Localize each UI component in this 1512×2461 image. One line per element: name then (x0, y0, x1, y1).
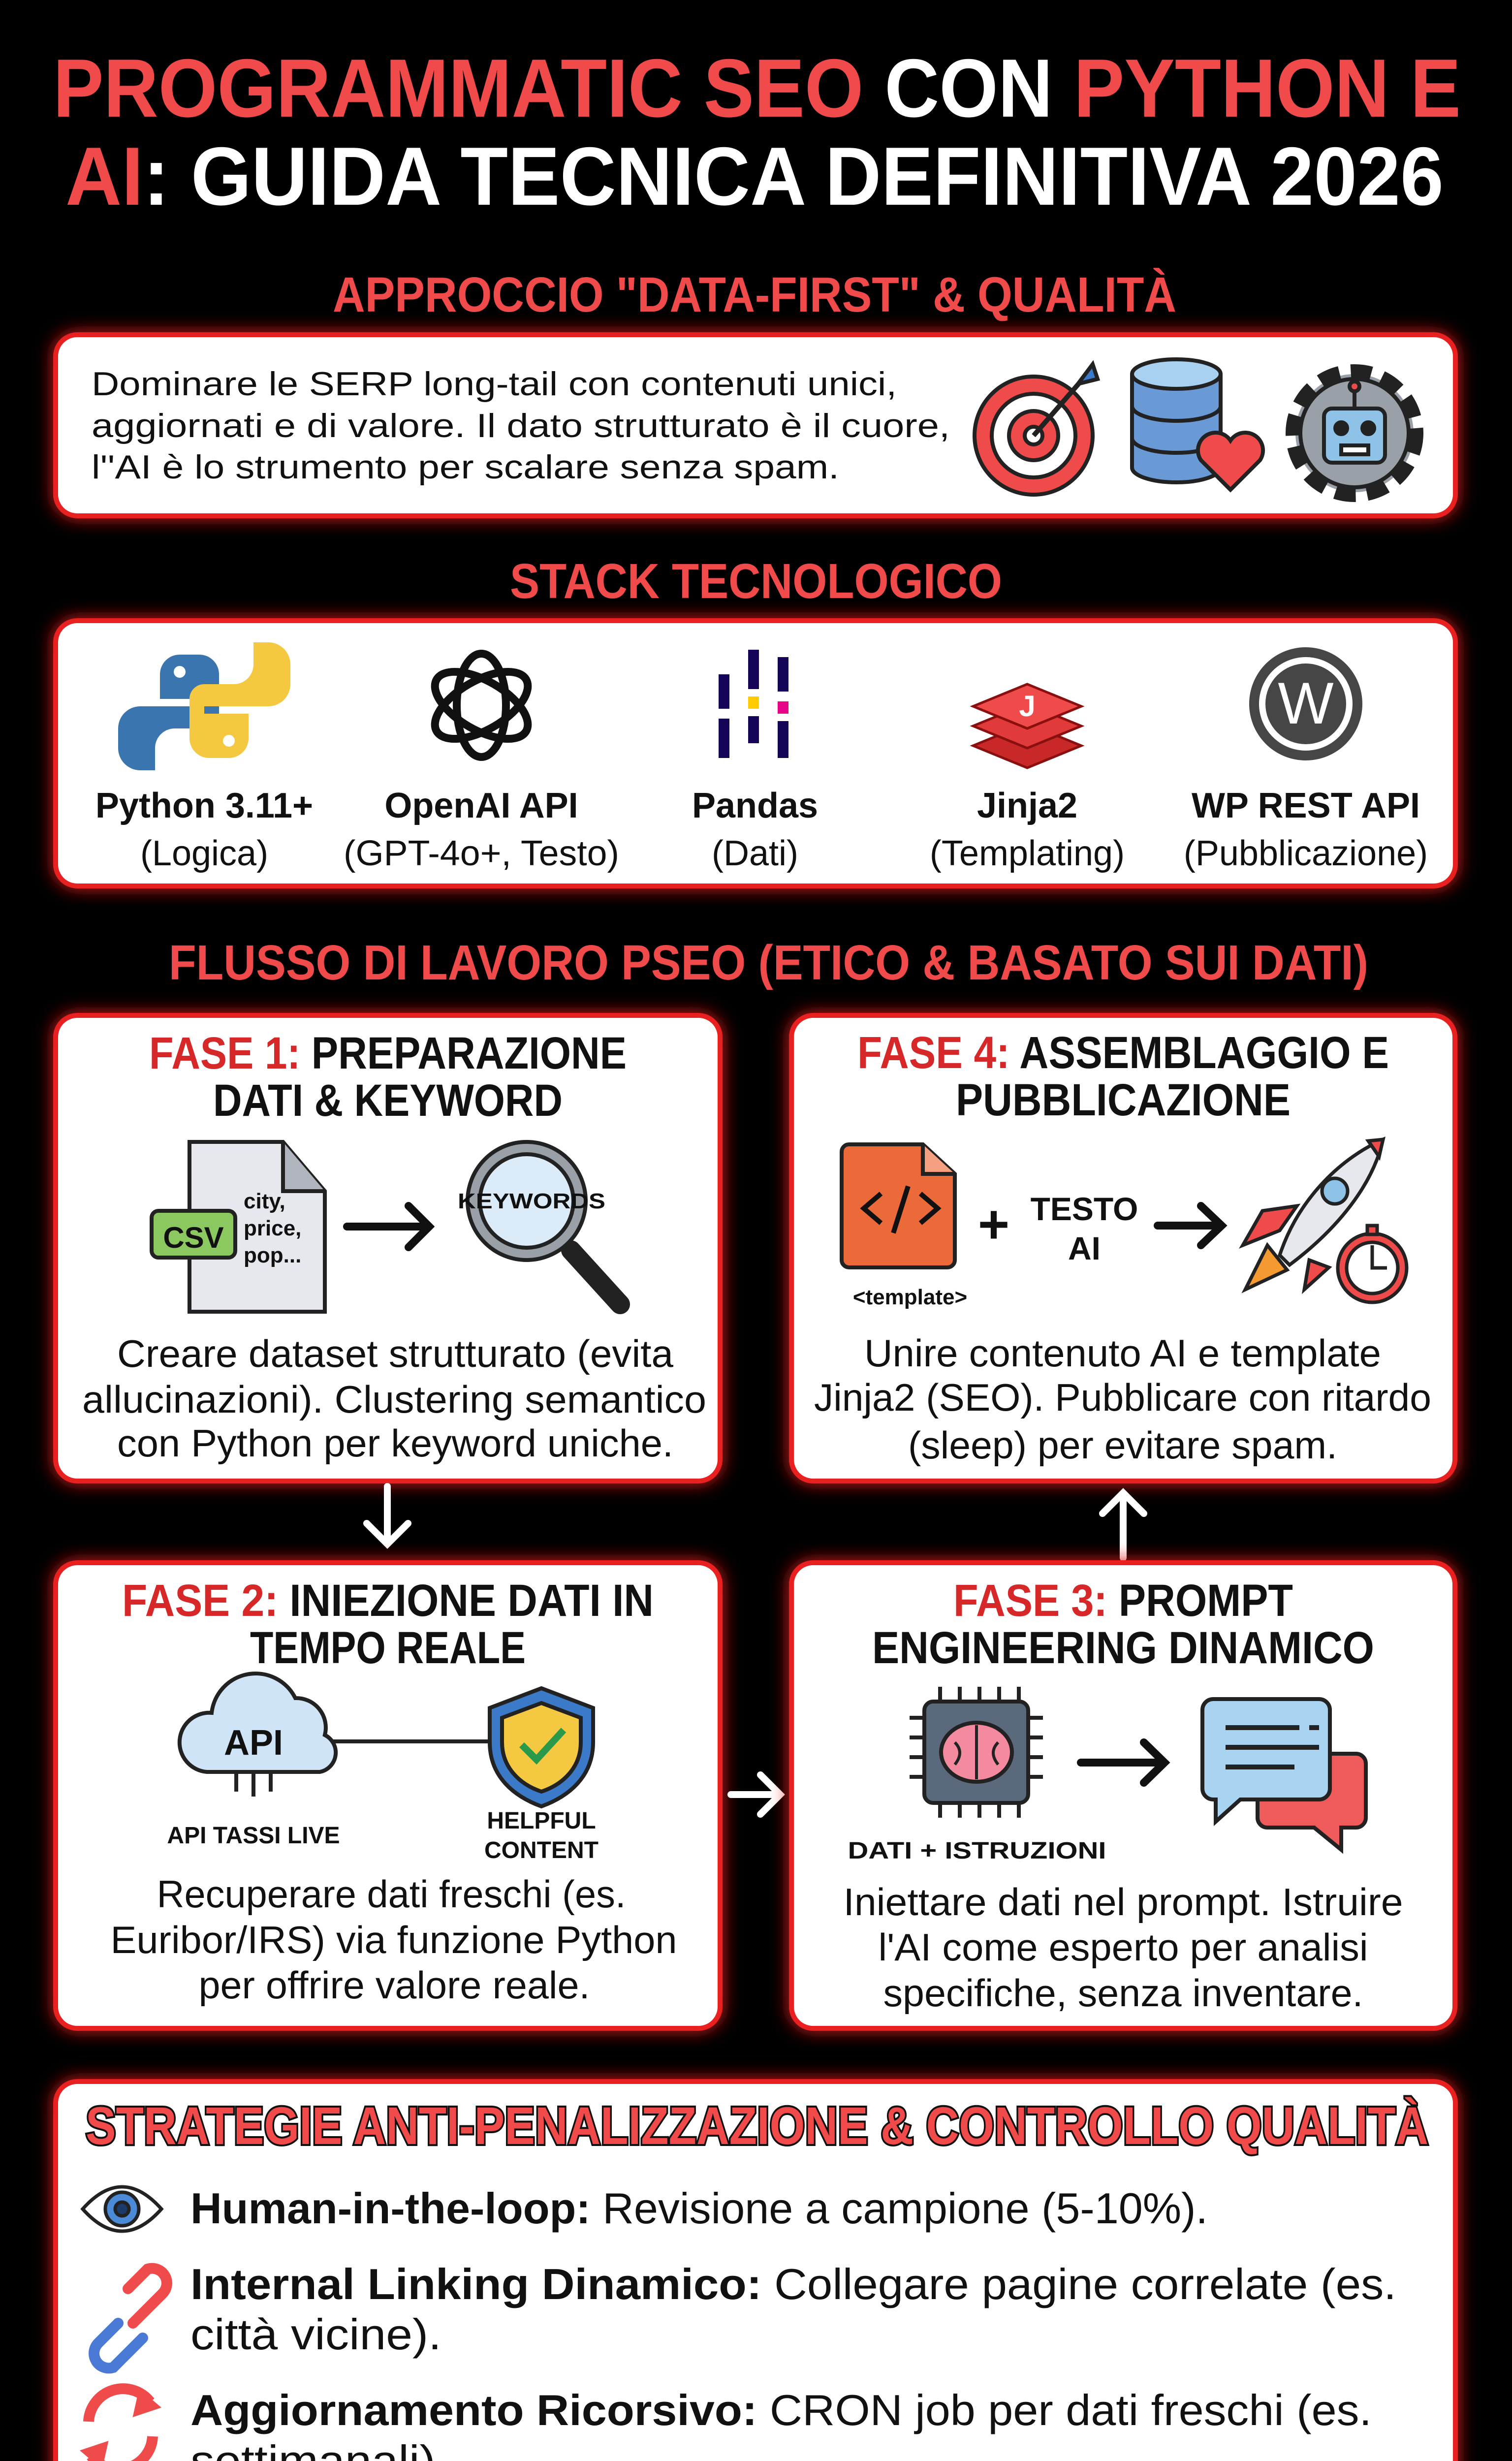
icon: link (94, 2269, 167, 2368)
item: human-in-the-loop: Human-in-the-loop: Revisione a campione (5-10%). (190, 2184, 1208, 2233)
icon: robot gear (1295, 374, 1414, 492)
panel: fase 4 (789, 1013, 1457, 1483)
plus and testo ai: AI (1068, 1230, 1101, 1266)
icon: shield helpful content: HELPFUL (487, 1808, 596, 1834)
icon: rocket (1243, 1139, 1407, 1302)
icon: api cloud (167, 1673, 492, 1849)
panel: fase 1: DATI & KEYWORD (213, 1075, 563, 1126)
arrow: fase1 to fase2 (367, 1486, 408, 1544)
labels: stack: (Templating) (930, 834, 1125, 873)
arrow (1158, 1206, 1222, 1245)
text block: approccio: aggiornati e di valore. Il dato strutturato è il cuore, (92, 407, 950, 444)
labels: stack (95, 786, 1428, 873)
title: AI: GUIDA TECNICA DEFINITIVA 2026 (65, 130, 1444, 222)
text block: fase 1: Creare dataset strutturato (evita (117, 1332, 674, 1375)
item: aggiornamento (190, 2386, 1372, 2461)
text block: fase 4 (814, 1331, 1431, 1467)
labels: stack: WP REST API (1192, 786, 1420, 825)
plus and testo ai: TESTO (1031, 1191, 1138, 1227)
icon: magnifier keywords (458, 1142, 620, 1304)
panel: approccio (53, 332, 1458, 518)
text block: fase 3: l'AI come esperto per analisi (878, 1925, 1368, 1969)
icon: csv file: CSV (163, 1221, 224, 1254)
panel: fase 2 (53, 1560, 723, 2031)
panel: strategie (53, 2079, 1458, 2461)
icon: chip brain: DATI + ISTRUZIONI (848, 1838, 1106, 1864)
text block: fase 4: (sleep) per evitare spam. (908, 1423, 1337, 1467)
labels: stack: (GPT-4o+, Testo) (344, 834, 619, 873)
panel: fase 4: FASE 4: ASSEMBLAGGIO E (857, 1028, 1389, 1078)
icon: wordpress (1249, 647, 1362, 760)
icon: openai (424, 654, 538, 757)
panel: fase 1: FASE 1: PREPARAZIONE (149, 1028, 627, 1078)
text block: fase 3: Iniettare dati nel prompt. Istruire (844, 1880, 1403, 1924)
icon: csv file (152, 1142, 325, 1312)
text block: approccio (92, 365, 950, 486)
title (53, 42, 1461, 222)
labels: stack: Jinja2 (977, 786, 1077, 825)
text block: fase 1: allucinazioni). Clustering semantico (82, 1378, 706, 1421)
heading: approccio: APPROCCIO "DATA-FIRST" & QUALITÀ (333, 267, 1176, 322)
title: PROGRAMMATIC SEO CON PYTHON E (53, 42, 1461, 134)
panel: fase 2: TEMPO REALE (250, 1623, 526, 1673)
icon: csv file: price, (244, 1216, 301, 1240)
panel: fase 3: FASE 3: PROMPT (953, 1576, 1293, 1626)
icon: code template (842, 1144, 967, 1309)
text block: fase 1: con Python per keyword uniche. (117, 1421, 673, 1465)
panel: fase 4: PUBBLICAZIONE (956, 1075, 1291, 1125)
text block: fase 4: Jinja2 (SEO). Pubblicare con ritardo (814, 1376, 1431, 1419)
icon: api cloud: API TASSI LIVE (167, 1823, 340, 1849)
text block: fase 1 (82, 1332, 706, 1465)
panel: fase 1 (53, 1013, 723, 1483)
icon: csv file: city, (244, 1189, 285, 1213)
icon: csv file: pop... (244, 1243, 301, 1267)
icon: jinja2: J (1019, 690, 1036, 723)
icon: chat bubbles (1202, 1699, 1366, 1850)
icon: code template: <template> (853, 1285, 967, 1309)
icon: shield helpful content: CONTENT (484, 1837, 598, 1863)
heading: flusso: FLUSSO DI LAVORO PSEO (ETICO & BASATO SUI DATI) (169, 935, 1368, 990)
arrow: fase3 to fase4 (1102, 1493, 1144, 1558)
text block: fase 4: Unire contenuto AI e template (864, 1331, 1381, 1375)
icon: eye (83, 2187, 161, 2231)
labels: stack: OpenAI API (384, 786, 578, 825)
icon: database heart (1132, 359, 1263, 490)
arrow: fase2 to fase3 (731, 1775, 780, 1814)
text block: approccio: l''AI è lo strumento per scalare senza spam. (92, 448, 839, 486)
plus and testo ai (978, 1191, 1138, 1266)
icon: chip brain (848, 1687, 1106, 1864)
panel: fase 2: FASE 2: INIEZIONE DATI IN (122, 1576, 654, 1626)
icon: target (975, 364, 1098, 495)
panel: fase 3: ENGINEERING DINAMICO (872, 1623, 1374, 1673)
icon: shield helpful content (484, 1688, 598, 1863)
icon: wordpress: W (1278, 670, 1334, 736)
item: internal linking: Internal Linking Dinamico: Collegare pagine correlate (es. (190, 2260, 1396, 2308)
labels: stack: (Logica) (140, 834, 268, 873)
icon: python (118, 642, 290, 770)
text block: fase 3: specifiche, senza inventare. (883, 1971, 1363, 2015)
arrow (1081, 1742, 1165, 1783)
labels: stack: (Pubblicazione) (1184, 834, 1428, 873)
text block: fase 2: Euribor/IRS) via funzione Python (110, 1918, 677, 1961)
text block: approccio: Dominare le SERP long-tail con contenuti unici, (92, 365, 897, 403)
icon: magnifier keywords: KEYWORDS (458, 1189, 605, 1213)
text block: fase 2: per offrire valore reale. (199, 1963, 590, 2007)
item: aggiornamento: Aggiornamento Ricorsivo: CRON job per dati freschi (es. (190, 2386, 1372, 2434)
icon: pandas (719, 650, 788, 758)
text block: fase 3 (844, 1880, 1403, 2015)
heading: stack tecnologico: STACK TECNOLOGICO (510, 554, 1002, 609)
plus and testo ai: + (978, 1194, 1009, 1255)
text block: fase 2 (110, 1872, 677, 2007)
item: internal linking (190, 2260, 1396, 2359)
icon: api cloud: API (224, 1723, 283, 1763)
icon: refresh (84, 2389, 158, 2461)
labels: stack: (Dati) (712, 834, 798, 873)
icon: jinja2 (973, 684, 1081, 768)
text block: fase 2: Recuperare dati freschi (es. (157, 1872, 626, 1916)
panel: fase 3 (789, 1560, 1457, 2031)
panel: stack (53, 618, 1458, 888)
labels: stack: Python 3.11+ (95, 786, 313, 825)
labels: stack: Pandas (692, 786, 818, 825)
item: internal linking: città vicine). (190, 2310, 441, 2359)
arrow (347, 1206, 429, 1247)
